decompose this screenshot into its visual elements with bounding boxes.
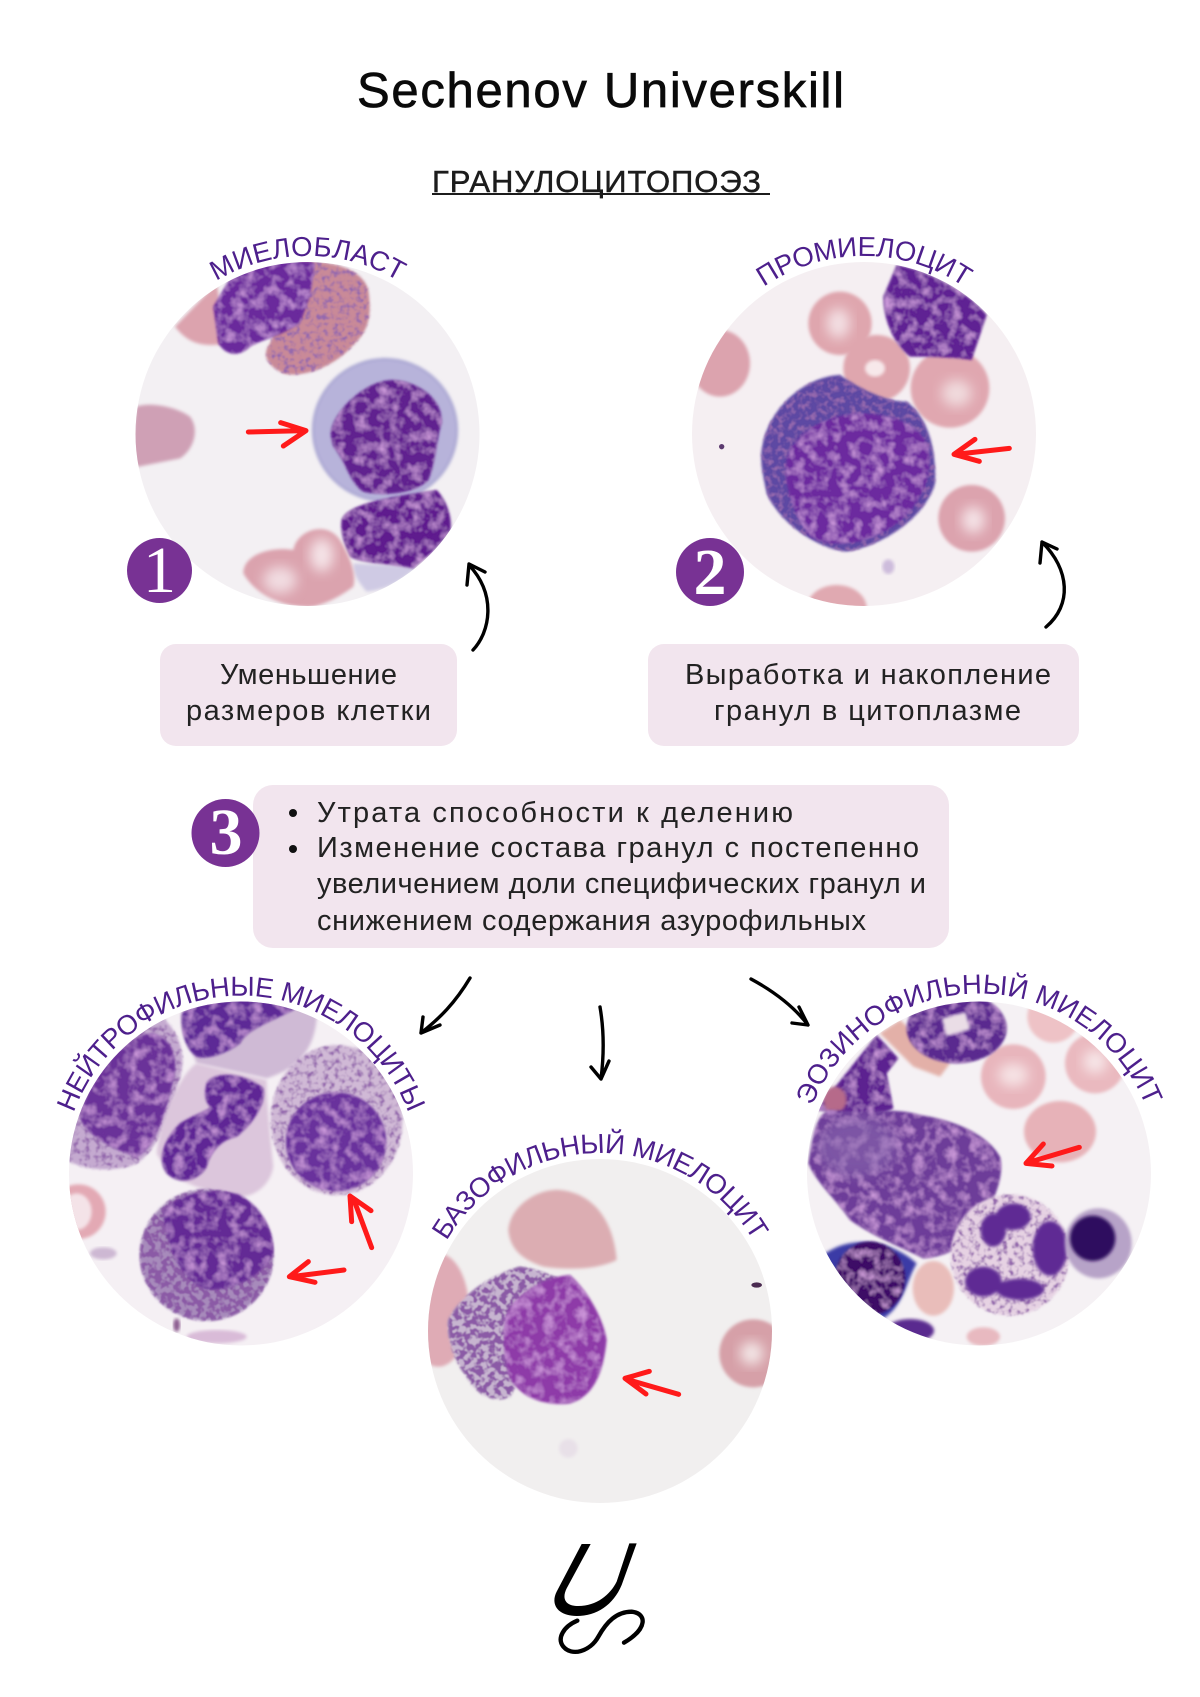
red arrow: basophilic myelocyte (625, 1371, 679, 1394)
micrograph: promyelocyte (692, 262, 1036, 606)
red arrow: promyelocyte (954, 439, 1009, 461)
panel: basophilic myelocyte (428, 1128, 772, 1503)
arrow: myelocyte from promyelocyte (1040, 542, 1064, 627)
micrograph: neutrophilic myelocytes (69, 1002, 413, 1346)
callout: myelocyte stage changes (253, 785, 949, 948)
label: basophilic myelocyte: БАЗОФИЛЬНЫЙ МИЕЛОЦИТ (432, 1128, 770, 1239)
heading: ГРАНУЛОЦИТОПОЭЗ (432, 164, 761, 199)
callout: myelocyte stage changes: снижением содержания азурофильных (317, 905, 866, 937)
label: myeloblast: МИЕЛОБЛАСТ (209, 236, 408, 280)
arrow: to basophilic myelocyte (591, 1007, 609, 1079)
callout: cell size reduction: Уменьшение (220, 659, 397, 691)
label: eosinophilic myelocyte: ЭОЗИНОФИЛЬНЫЙ МИЕЛОЦИТ (798, 972, 1163, 1103)
micrograph: myeloblast (136, 262, 480, 606)
callout: myelocyte stage changes: Утрата способности к делению (317, 797, 793, 829)
panel: neutrophilic myelocytes (56, 976, 426, 1346)
red arrows: neutrophilic myelocytes (289, 1196, 372, 1282)
label: promyelocyte: ПРОМИЕЛОЦИТ (756, 237, 974, 286)
callout: granule production: гранул в цитоплазме (714, 695, 1021, 727)
red arrow: myeloblast (248, 423, 306, 446)
badge 3: 3 (210, 796, 242, 869)
callout: myelocyte stage changes: Изменение состава гранул с постепенно (317, 832, 919, 864)
label: neutrophilic myelocytes: НЕЙТРОФИЛЬНЫЕ МИЕЛОЦИТЫ (56, 976, 426, 1111)
arrow: to eosinophilic myelocyte (751, 979, 808, 1025)
red arrow: eosinophilic myelocyte (1026, 1144, 1079, 1166)
micrograph: basophilic myelocyte (428, 1159, 772, 1503)
title: Sechenov Universkill (357, 64, 844, 118)
badge 1 (127, 534, 192, 607)
badge 1: 1 (143, 534, 176, 607)
callout: myelocyte stage changes: увеличением доли специфических гранул и (317, 868, 926, 900)
badge 3 (192, 796, 260, 869)
badge 2 (676, 536, 744, 609)
badge 2: 2 (694, 536, 726, 609)
callout: granule production (648, 644, 1079, 746)
panel: eosinophilic myelocyte (798, 972, 1163, 1346)
panel: promyelocyte (676, 237, 1036, 609)
callout: cell size reduction (160, 644, 457, 746)
arrow: to neutrophilic myelocytes (421, 978, 470, 1033)
panel: myeloblast (127, 236, 480, 607)
callout: cell size reduction: размеров клетки (186, 695, 431, 727)
arrow: promyelocyte from myeloblast (467, 564, 488, 650)
callout: granule production: Выработка и накопление (685, 659, 1051, 691)
micrograph: eosinophilic myelocyte (807, 1002, 1151, 1346)
logo: US monogram (554, 1543, 643, 1652)
